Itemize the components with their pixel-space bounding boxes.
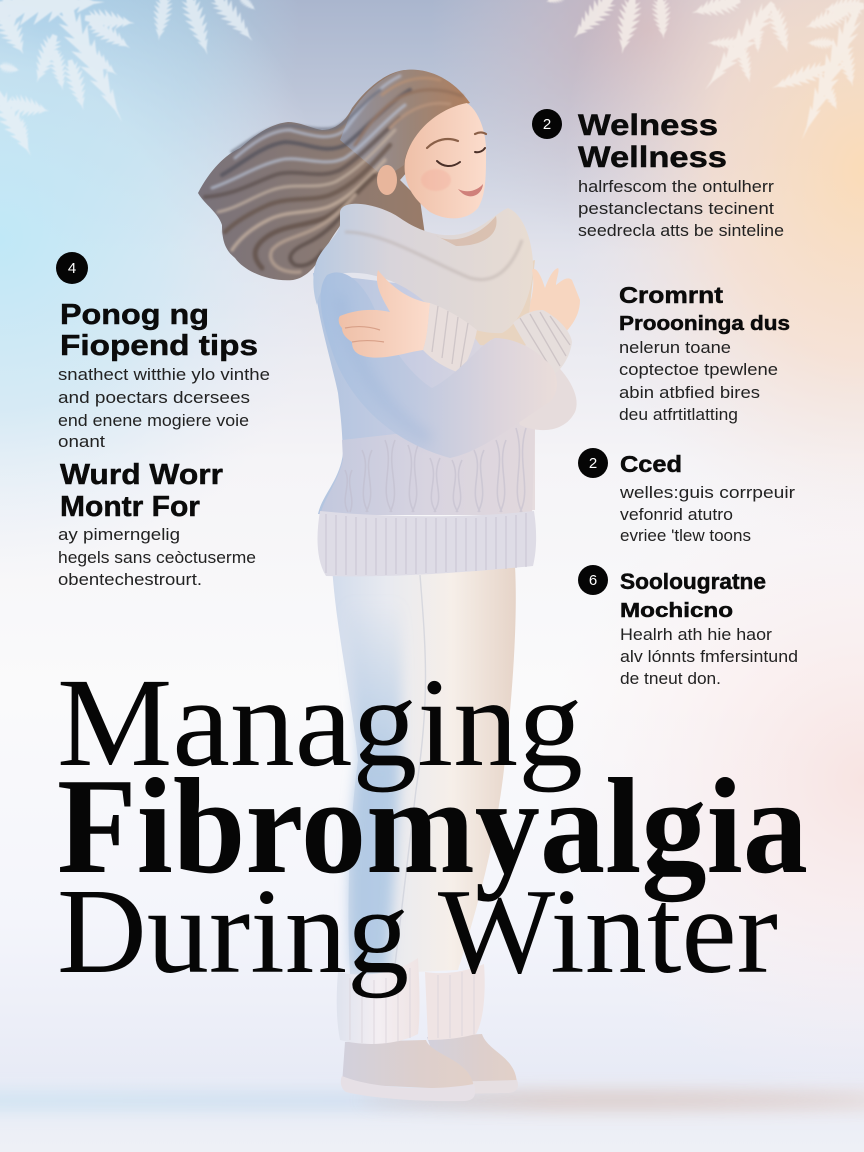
left column: item 4	[56, 252, 270, 451]
body text: hegels sans ceòctuserme	[58, 548, 256, 567]
near cuff	[423, 303, 477, 373]
heading: Cromrnt	[619, 282, 723, 308]
body text: de tneut don.	[620, 669, 721, 688]
heading: Montr For	[60, 491, 200, 523]
heading	[60, 459, 223, 523]
leg warmers	[337, 958, 485, 1044]
body text: seedrecla atts be sinteline	[578, 221, 784, 240]
body text: Healrh ath hie haor	[620, 625, 772, 644]
body text: evriee 'tlew toons	[620, 526, 751, 545]
body text: snathect witthie ylo vinthe	[58, 365, 270, 384]
number badge: 4	[68, 260, 76, 277]
body text: welles:guis corrpeuir	[619, 483, 795, 502]
illustration: woman hugging herself	[198, 70, 864, 1107]
body text: onant	[58, 432, 105, 451]
number badge: 2	[543, 116, 551, 133]
hair	[198, 70, 470, 280]
right column: cced	[578, 448, 795, 545]
number badge	[532, 109, 562, 139]
frost branches: top right	[544, 0, 864, 144]
boots	[341, 1034, 518, 1101]
heading: Soolougratne	[620, 569, 766, 594]
heading: Wellness	[578, 141, 727, 174]
body text	[619, 483, 795, 545]
body text	[619, 338, 778, 424]
heading	[619, 282, 790, 335]
body text: halrfescom the ontulherr	[578, 177, 774, 196]
heading: Cced	[620, 451, 682, 477]
heading: Wurd Worr	[60, 459, 223, 491]
body text: nelerun toane	[619, 338, 731, 357]
body text: and poectars dcersees	[58, 388, 250, 407]
near hand	[339, 270, 430, 358]
heading	[60, 299, 258, 362]
number badge	[578, 448, 608, 478]
body text: vefonrid atutro	[620, 505, 733, 524]
body text: abin atbfied bires	[619, 383, 760, 402]
heading: Proooninga dus	[619, 313, 790, 335]
body text	[58, 365, 270, 451]
frost branches: top left	[0, 0, 136, 161]
hand on shoulder far side	[528, 268, 580, 345]
body text: coptectoe tpewlene	[619, 360, 778, 379]
heading	[578, 109, 727, 174]
number badge: 2	[589, 455, 597, 472]
right column: wellness	[532, 109, 784, 240]
sweater body	[313, 273, 535, 515]
title: During Winter	[57, 864, 778, 999]
body text	[58, 525, 256, 589]
left column: second item	[58, 459, 256, 589]
chest under scarf	[440, 260, 535, 350]
right column: cromrnt	[619, 282, 790, 424]
title: Managing	[57, 653, 583, 793]
number badge	[56, 252, 88, 284]
heading: Fiopend tips	[60, 330, 258, 362]
body text: obentechestrourt.	[58, 570, 202, 589]
heading	[620, 569, 766, 622]
scarf	[313, 204, 533, 333]
body text: pestanclectans tecinent	[578, 199, 774, 218]
sweater hem	[318, 511, 536, 576]
body text: ay pimerngelig	[58, 525, 180, 544]
pants	[332, 566, 516, 975]
body text: deu atfrtitlatting	[619, 405, 738, 424]
body text	[578, 177, 784, 240]
heading: Welness	[578, 109, 718, 142]
head	[377, 103, 486, 218]
number badge	[578, 565, 608, 595]
body text: alv lónnts fmfersintund	[620, 647, 798, 666]
far sleeve	[490, 340, 577, 430]
heading: Mochicno	[620, 600, 733, 622]
body text: end enene mogiere voie	[58, 411, 249, 430]
title: Fibromyalgia	[57, 750, 808, 902]
right column: soolougratne	[578, 565, 798, 688]
heading: Ponog ng	[60, 299, 209, 331]
body text	[620, 625, 798, 688]
floor shadow	[360, 1093, 864, 1107]
number badge: 6	[589, 572, 597, 589]
far cuff	[513, 310, 572, 377]
title	[57, 653, 808, 999]
hugging arm sleeve	[321, 272, 557, 458]
frost branches: top centre left	[149, 0, 260, 58]
